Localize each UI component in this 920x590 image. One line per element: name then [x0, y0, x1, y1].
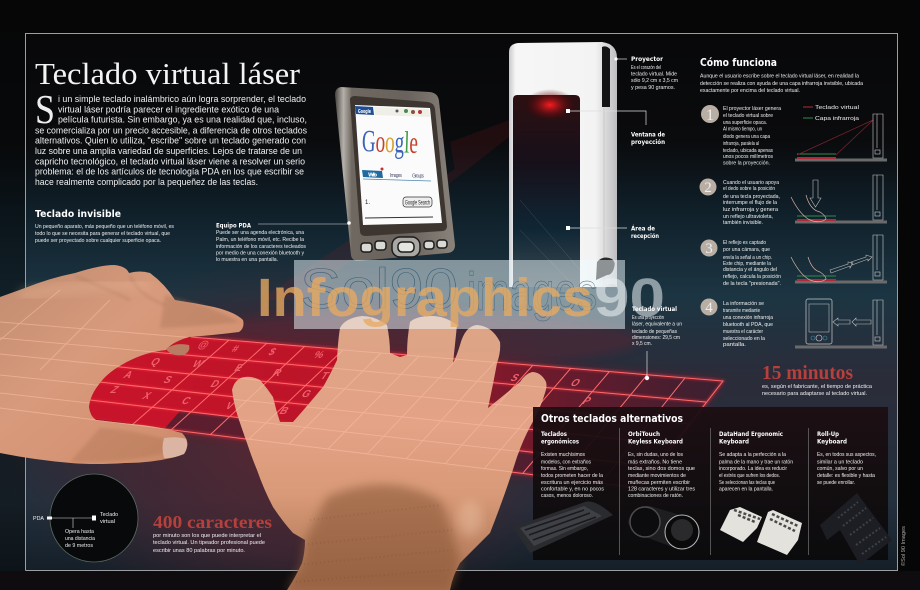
step 1: diodo genera una capa	[723, 134, 771, 140]
ergonomic keyboard image	[513, 502, 613, 553]
PDA device	[335, 87, 455, 261]
intro text: capricho tecnológico, el teclado virtual láser viene a resolver un serio	[35, 156, 305, 166]
roll-up image	[820, 493, 892, 565]
step 2: el dedo sobre la posición	[723, 186, 775, 192]
orbitouch image	[628, 506, 700, 549]
step 1: El proyector láser genera	[723, 106, 782, 112]
watermark: 90	[594, 268, 665, 328]
key labels: $	[266, 346, 278, 358]
step 4: una conexión infrarroja	[723, 315, 774, 321]
column: roll-up: común, salvo por un	[817, 466, 863, 472]
PDA device: 1.	[365, 200, 370, 206]
drop cap: S	[35, 86, 55, 132]
step 4: bluetooth al PDA, que	[723, 322, 773, 328]
projector device	[509, 42, 617, 287]
step 4: muestra el carácter	[723, 329, 763, 335]
column: datahand: aparecen en la pantalla.	[719, 486, 773, 492]
callout: teclado virtual: Es una proyección	[632, 315, 664, 321]
projected keyboard lines over hands	[0, 290, 546, 472]
key labels: G	[300, 388, 313, 400]
intro text: alternativos. Quien lo utiliza, "escribe" sobre un teclado generado con	[35, 136, 306, 146]
PDA device: Google	[358, 109, 371, 115]
watermark: Infographics	[257, 268, 593, 328]
diagram 3	[791, 235, 887, 282]
stat: 15 minutos	[762, 362, 873, 397]
stat: 15 minutos: 15 minutos	[762, 362, 853, 384]
callout: proyector: y pesa 90 gramos.	[631, 85, 675, 91]
key labels: V	[224, 400, 237, 412]
step 3: 3	[705, 241, 713, 257]
panel: otros teclados alternativos	[513, 407, 892, 565]
column: datahand: Se seleccionan las teclas que	[719, 480, 775, 486]
key labels: X	[140, 390, 154, 402]
intro text: se comercializa por un precio accesible, a diferencia de otros teclados	[35, 126, 307, 136]
panel: como funciona	[700, 56, 887, 348]
callout: equipo PDA: lo muestra en una pantalla.	[216, 257, 278, 263]
stat: 15 minutos: necesario para adaptarse al teclado virtual.	[762, 391, 867, 397]
column: ergonomicos: ergonómicos	[541, 438, 579, 446]
column: orbitouch	[628, 431, 700, 549]
stat: 400 caracteres: por minuto son los que puede interpretar el	[153, 533, 261, 539]
section: teclado invisible: Un pequeño aparato, más pequeño que un teléfono móvil, es	[35, 224, 174, 230]
PDA device: Groups	[412, 174, 424, 180]
callout: equipo PDA: Puede ser una agenda electrónica, una	[216, 230, 305, 236]
step 1: una superficie opaca.	[723, 120, 767, 126]
projection window	[513, 95, 580, 287]
column: roll-up: Roll-Up	[817, 431, 839, 438]
step 2: Cuando el usuario apoya	[723, 180, 780, 186]
background haze near keyboard	[160, 312, 640, 368]
column: ergonomicos	[513, 431, 613, 553]
heading: Cómo funciona	[700, 56, 777, 69]
key labels: %	[312, 349, 326, 361]
column: orbitouch: muñecas permiten escribir	[628, 480, 690, 486]
key labels: #	[230, 343, 241, 355]
column: datahand: palma de la mano y trae un ratón	[719, 460, 793, 466]
range diagram: Opera hasta	[65, 529, 95, 535]
step 2: un reflejo ultravioleta,	[723, 214, 773, 220]
step 2: interrumpe el flujo de la	[723, 200, 778, 206]
diagram 1	[795, 105, 887, 160]
key labels: E	[233, 362, 246, 374]
column: datahand: DataHand Ergonomic	[719, 431, 783, 438]
step 3: de la tecla "presionada".	[723, 281, 781, 287]
diagram 4	[795, 299, 887, 347]
column: ergonomicos: formas. Sin embargo,	[541, 466, 588, 472]
column: orbitouch: más extraños. No tiene	[628, 460, 682, 466]
diagram 1: Capa infrarroja	[815, 116, 860, 122]
column: ergonomicos: Teclados	[541, 431, 567, 438]
step 3: Este chip, mediante la	[723, 261, 772, 267]
callout: equipo PDA: por medio de una conexión bluetooth y	[216, 250, 304, 256]
step 4: pantalla.	[723, 342, 746, 348]
column: datahand	[719, 431, 802, 555]
callout: equipo PDA	[216, 222, 349, 263]
section: teclado invisible: Teclado invisible	[35, 209, 121, 220]
step 1: el teclado virtual sobre	[723, 113, 773, 119]
key labels: W	[191, 358, 206, 370]
intro text: hace realmente complicado por la pequeñez de las teclas.	[35, 177, 258, 187]
callout: recepcion: Área de	[631, 224, 655, 232]
key labels: Z	[108, 384, 121, 396]
column: orbitouch: Keyless Keyboard	[628, 438, 683, 446]
step 2: 2	[704, 180, 712, 196]
column: datahand: Se adapta a la perfección a la	[719, 452, 787, 458]
column: orbitouch: mediante movimientos de	[628, 473, 686, 479]
column: roll-up: Keyboard	[817, 438, 847, 446]
column: roll-up: detalle: es flexible y hasta	[817, 473, 876, 479]
key labels: B	[278, 405, 291, 417]
fingertip under hand	[166, 344, 189, 355]
intro text	[35, 86, 307, 187]
column: roll-up: se puede enrollar.	[817, 480, 855, 486]
step 1: 1	[706, 107, 714, 124]
intro text: película futurista. Sin embargo, ya es una realidad que, incluso,	[58, 114, 307, 124]
range diagram: de 9 metros	[65, 543, 93, 549]
step 2: luz infrarroja y genera	[723, 207, 779, 213]
stat: 15 minutos: es, según el fabricante, el tiempo de práctica	[762, 384, 873, 390]
step 3: por una cámara, que	[723, 247, 770, 253]
virtual keyboard projection	[60, 332, 723, 488]
column: datahand: el estrés que sufren los dedos.	[719, 473, 780, 479]
step 2	[700, 178, 780, 226]
stat: 400 caracteres: teclado virtual. Un tipeador profesional puede	[153, 540, 265, 546]
callout: recepcion	[566, 224, 659, 240]
callout: proyector: teclado virtual. Mide	[631, 72, 677, 78]
column: ergonomicos: escritura un ejercicio más	[541, 480, 603, 486]
right hand	[232, 316, 546, 590]
step 4: 4	[705, 300, 713, 316]
callout: teclado virtual: x 9,5 cm.	[632, 341, 652, 347]
range diagram	[33, 474, 138, 562]
step 2: también invisible.	[723, 220, 763, 226]
pda buttons	[361, 237, 447, 257]
step 3	[700, 240, 781, 287]
step 2: de una tecla proyectada,	[723, 194, 780, 200]
step 3: El reflejo es captado	[723, 240, 766, 246]
watermark: Sol90	[300, 257, 458, 321]
PDA device: Images	[390, 173, 402, 179]
key labels: D	[209, 378, 222, 390]
key labels: R	[271, 367, 284, 379]
key labels: S	[509, 372, 521, 384]
column: ergonomicos: modelos, con extraños	[541, 460, 591, 466]
intro: exactamente por encima del teclado virtual.	[700, 88, 800, 94]
column: ergonomicos: Existen muchísimos	[541, 452, 585, 458]
stat: 400 caracteres: escribir unas 80 palabras por minuto.	[153, 548, 245, 554]
intro: Aunque el usuario escribe sobre el teclado virtual láser, en realidad la	[700, 74, 860, 80]
column: orbitouch: 128 caracteres y utilizar tres	[628, 486, 695, 492]
column: orbitouch: OrbiTouch	[628, 431, 660, 438]
datahand image	[720, 507, 802, 555]
PDA device: Web	[368, 172, 377, 178]
key labels: T	[319, 370, 332, 382]
range diagram: PDA	[33, 516, 44, 522]
key labels: @	[196, 339, 211, 351]
key labels: A	[121, 369, 134, 381]
column: orbitouch: Es, sin dudas, uno de los	[628, 452, 683, 458]
watermark	[257, 257, 665, 329]
step 4: seleccionado en la	[723, 336, 766, 342]
step 3: reflejo, calcula la posición	[723, 274, 781, 280]
callout: proyector: Es el corazón del	[631, 65, 661, 71]
column: ergonomicos: confortable y, en no pocos	[541, 486, 604, 492]
diagram 1: Teclado virtual	[815, 105, 859, 111]
diagram 2	[791, 175, 887, 222]
key labels: P	[581, 395, 594, 407]
key labels: Q	[149, 356, 162, 368]
watermark: images	[467, 262, 597, 322]
callout: equipo PDA: información de los caracteres tecleados	[216, 244, 306, 250]
callout: equipo PDA: Palm, un teléfono móvil, etc. Recibe la	[216, 237, 305, 243]
stat: 400 caracteres: 400 caracteres	[153, 512, 272, 532]
section: teclado invisible: puede ser proyectado sobre cualquier superficie opaca.	[35, 238, 161, 244]
intro text: luz sobre una amplia variedad de superficies. Lejos de tratarse de un	[35, 146, 302, 156]
callout: teclado virtual: láser, equivalente a un	[632, 322, 682, 328]
callouts: device parts	[566, 56, 682, 380]
step 3: envía la señal a un chip.	[723, 255, 772, 261]
callout: recepcion: recepción	[631, 232, 659, 240]
credit: ©Sol 90 Images	[900, 526, 907, 566]
callout: equipo PDA: Equipo PDA	[216, 222, 251, 230]
column: roll-up: Es, en todos sus aspectos,	[817, 452, 876, 458]
column: ergonomicos: todos prometen hacer de la	[541, 473, 604, 479]
intro: detección se realiza con ayuda de una capa infrarroja invisible, ubicada	[700, 81, 864, 87]
step 4: transmite mediante	[723, 308, 760, 314]
callout: teclado virtual: teclado de pequeñas	[632, 329, 677, 335]
callout: proyector	[614, 56, 678, 91]
key labels: C	[180, 395, 193, 407]
google logo: Google	[361, 123, 419, 160]
callout: proyector: Proyector	[631, 56, 664, 63]
column: ergonomicos: casos, menos doloroso.	[541, 493, 593, 499]
intro text: virtual láser podría parecer el ingrediente exótico de una	[58, 104, 279, 114]
column: datahand: Keyboard	[719, 438, 749, 446]
range diagram: virtual	[100, 519, 115, 525]
step 4	[700, 298, 774, 348]
column: roll-up: similar a un teclado	[817, 460, 863, 466]
left hand	[0, 265, 244, 464]
callout: teclado virtual: dimensiones: 29,5 cm	[632, 335, 680, 341]
intro	[700, 74, 864, 94]
title: Teclado virtual láser	[35, 56, 301, 91]
step 3: distancia y el ángulo del	[723, 267, 777, 273]
column: roll-up	[817, 431, 892, 565]
callout: ventana	[566, 109, 665, 146]
column: orbitouch: teclas, sino dos domos que	[628, 466, 695, 472]
callout: proyector: sólo 9,2 cm x 3,5 cm	[631, 78, 678, 84]
column: datahand: incorporado. La idea es reducir	[719, 466, 787, 472]
step 1: Al mismo tiempo, un	[723, 126, 762, 132]
step 4: La información se	[723, 301, 764, 307]
intro text: problema: el de los artículos de tecnología PDA en los que escribir se	[35, 166, 304, 176]
heading: Otros teclados alternativos	[541, 413, 683, 425]
step 1: teclado, ubicada apenas	[723, 148, 773, 154]
callout: ventana: Ventana de	[631, 132, 665, 138]
laser beam from device to pda	[260, 105, 550, 300]
step 1: infrarroja, paralela al	[723, 141, 759, 147]
step 1	[701, 105, 782, 166]
thumbnail	[162, 437, 187, 458]
intro text: i un simple teclado inalámbrico aún logra sorprender, el teclado	[58, 94, 306, 104]
key labels: O	[569, 377, 582, 389]
callout: teclado virtual: Teclado virtual	[632, 306, 677, 313]
stat: 400 caracteres	[153, 512, 272, 554]
PDA device: Google Search	[405, 200, 430, 206]
range diagram: Teclado	[100, 512, 118, 518]
callout: ventana: proyección	[631, 138, 665, 146]
section: teclado invisible: todo lo que se necesita para generar el teclado virtual, que	[35, 231, 170, 237]
step 1: unos pocos milímetros	[723, 154, 773, 160]
range diagram: una distancia	[65, 536, 96, 542]
callout: teclado virtual	[632, 306, 682, 380]
key labels: S	[162, 374, 174, 386]
step 1: sobre la proyección.	[723, 160, 770, 166]
key labels	[108, 339, 594, 417]
wrist shading	[287, 485, 460, 590]
section: teclado invisible	[35, 209, 174, 244]
column: orbitouch: combinaciones de ratón.	[628, 493, 683, 499]
